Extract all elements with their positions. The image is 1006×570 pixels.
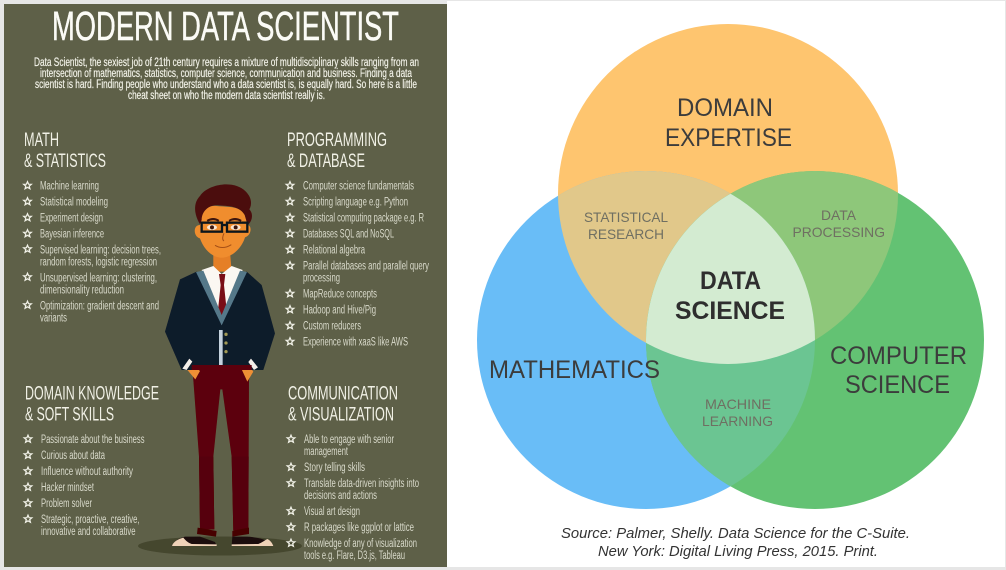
list: programming and database: Relational algebra <box>303 244 365 256</box>
label: statistical research: RESEARCH <box>588 226 664 242</box>
label: computer science: COMPUTER <box>830 342 967 370</box>
list: domain knowledge and soft skills: Influence without authority <box>41 466 133 478</box>
list: domain knowledge and soft skills: innovative and collaborative <box>41 526 136 538</box>
heading: programming and database: & DATABASE <box>287 150 365 172</box>
label: mathematics: MATHEMATICS <box>489 356 660 384</box>
intro text: Data Scientist, the sexiest job of 21th century requires a mixture of multidisciplinary skills ranging from an <box>34 57 419 69</box>
intro text <box>34 57 419 102</box>
label: data processing <box>792 207 885 240</box>
panel: venn diagram <box>447 1 1005 567</box>
list: communication and visualization: R packages like ggplot or lattice <box>304 522 414 534</box>
overlap: machine learning <box>646 194 815 486</box>
list: communication and visualization: Knowledge of any of visualization <box>304 538 417 550</box>
list: math and statistics: Experiment design <box>40 212 103 224</box>
list: programming and database <box>286 180 429 348</box>
label: domain expertise: DOMAIN <box>677 94 773 122</box>
source citation: New York: Digital Living Press, 2015. Print. <box>598 544 878 560</box>
overlap: statistical research <box>558 171 730 343</box>
list: programming and database: Hadoop and Hive/Pig <box>303 304 376 316</box>
list: math and statistics: Machine learning <box>40 180 99 192</box>
illustration: data scientist figure <box>165 184 275 546</box>
heading: math and statistics: & STATISTICS <box>24 150 106 172</box>
title: MODERN DATA SCIENTIST <box>52 3 399 49</box>
list: domain knowledge and soft skills: Passionate about the business <box>41 434 145 446</box>
label: machine learning <box>702 396 773 429</box>
list: math and statistics: dimensionality reduction <box>40 284 124 296</box>
list: programming and database: Experience with xaaS like AWS <box>303 336 408 348</box>
list: programming and database: Statistical computing package e.g. R <box>303 212 424 224</box>
label: domain expertise: EXPERTISE <box>665 124 792 152</box>
intro text: intersection of mathematics, statistics, computer science, communication and business. Finding a data <box>40 68 412 80</box>
heading: communication and visualization <box>288 382 398 426</box>
list: programming and database: processing <box>303 272 340 284</box>
list: communication and visualization: Able to engage with senior <box>304 434 394 446</box>
list: communication and visualization: tools e.g. Flare, D3.js, Tableau <box>304 550 405 562</box>
list: communication and visualization <box>287 434 419 562</box>
heading: math and statistics: MATH <box>24 129 59 151</box>
label: machine learning: LEARNING <box>702 413 773 429</box>
list: communication and visualization: decisions and actions <box>304 490 377 502</box>
list: math and statistics: Bayesian inference <box>40 228 104 240</box>
label: data science: SCIENCE <box>675 297 785 325</box>
list: programming and database: Custom reducers <box>303 320 361 332</box>
list: communication and visualization: management <box>304 446 349 458</box>
list: domain knowledge and soft skills: Problem solver <box>41 498 92 510</box>
list: math and statistics: Supervised learning: decision trees, <box>40 244 161 256</box>
label: domain expertise <box>665 94 792 152</box>
label: statistical research: STATISTICAL <box>584 209 668 225</box>
heading: domain knowledge and soft skills: DOMAIN KNOWLEDGE <box>25 382 159 404</box>
shadow under figure <box>138 536 302 556</box>
list: math and statistics: variants <box>40 312 67 324</box>
list: math and statistics: random forests, logistic regression <box>40 256 157 268</box>
figure legs and shoes <box>172 364 273 546</box>
list: communication and visualization: Story telling skills <box>304 462 365 474</box>
label: computer science: SCIENCE <box>845 371 950 399</box>
heading: communication and visualization: COMMUNICATION <box>288 382 398 404</box>
label: computer science <box>830 342 967 399</box>
list: domain knowledge and soft skills: Strategic, proactive, creative, <box>41 514 140 526</box>
source citation <box>561 526 910 560</box>
figure torso and head <box>165 184 275 370</box>
heading: programming and database <box>287 129 387 172</box>
list: programming and database: Computer science fundamentals <box>303 180 414 192</box>
list: programming and database: Parallel databases and parallel query <box>303 260 429 272</box>
label: data processing: PROCESSING <box>792 224 885 240</box>
list: communication and visualization: Translate data-driven insights into <box>304 478 419 490</box>
list: math and statistics <box>24 180 161 324</box>
list: communication and visualization: Visual art design <box>304 506 360 518</box>
circle: domain expertise <box>558 24 898 364</box>
list: programming and database: Scripting language e.g. Python <box>303 196 408 208</box>
list: programming and database: Databases SQL and NoSQL <box>303 228 394 240</box>
heading: domain knowledge and soft skills: & SOFT SKILLS <box>25 404 114 426</box>
label: data science <box>675 267 785 325</box>
circle: mathematics <box>477 171 815 509</box>
intro text: cheat sheet on who the modern data scientist really is. <box>128 90 325 102</box>
intro text: scientist is hard. Finding people who understand who a data scientist is, is equally hard. So here is a little <box>35 79 417 91</box>
list: math and statistics: Unsupervised learning: clustering, <box>40 272 157 284</box>
heading: domain knowledge and soft skills <box>25 382 159 426</box>
panel: modern data scientist <box>4 3 447 567</box>
label: data science: DATA <box>700 267 761 295</box>
list: domain knowledge and soft skills: Hacker mindset <box>41 482 95 494</box>
circle: computer science <box>646 171 984 509</box>
label: statistical research <box>584 209 668 242</box>
heading: math and statistics <box>24 129 106 172</box>
label: machine learning: MACHINE <box>705 396 771 412</box>
list: domain knowledge and soft skills <box>24 434 145 538</box>
label: data processing: DATA <box>821 207 857 223</box>
heading: communication and visualization: & VISUALIZATION <box>288 404 394 426</box>
heading: programming and database: PROGRAMMING <box>287 129 387 151</box>
list: math and statistics: Optimization: gradient descent and <box>40 300 159 312</box>
source citation: Source: Palmer, Shelly. Data Science for the C-Suite. <box>561 526 910 542</box>
overlap: data processing <box>646 171 898 340</box>
list: math and statistics: Statistical modeling <box>40 196 108 208</box>
overlap: data science <box>646 194 815 364</box>
list: domain knowledge and soft skills: Curious about data <box>41 450 105 462</box>
list: programming and database: MapReduce concepts <box>303 288 377 300</box>
